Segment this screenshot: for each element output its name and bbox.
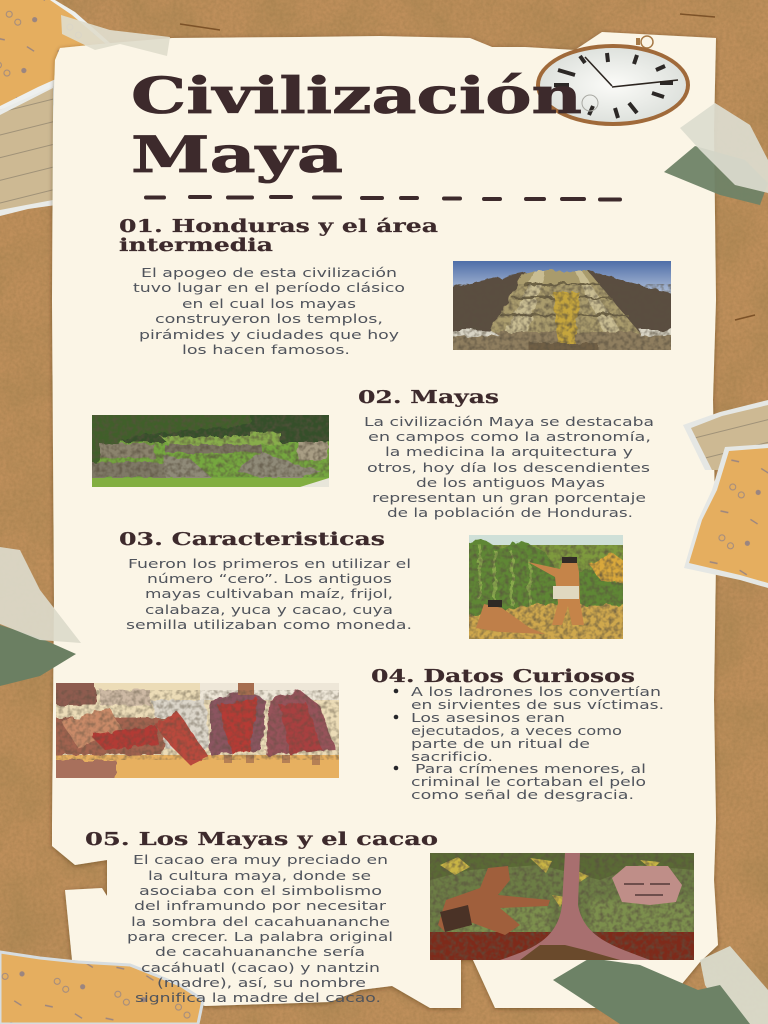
title: Civilización	[131, 66, 582, 125]
body text: 02: de la población de Honduras.	[387, 505, 633, 520]
body text: 01: El apogeo de esta civilización	[141, 265, 397, 280]
heading: 02: 02. Mayas	[358, 388, 499, 408]
body text: 05: (madre), así, su nombre	[157, 975, 366, 990]
body text: 02: la medicina la arquitectura y	[385, 444, 633, 459]
pocket watch	[536, 36, 690, 126]
body text: 03: semilla utilizaban como moneda.	[126, 617, 412, 632]
section 04	[50, 667, 664, 802]
body text: 05: El cacao era muy preciado en	[133, 852, 388, 867]
section 03	[119, 530, 630, 645]
body text: 05: la cultura maya, donde se	[148, 868, 371, 883]
bullet list: 04: sacrificio.	[411, 749, 493, 764]
bullet list: 04: A los ladrones los convertían	[411, 684, 661, 699]
scrap: bottom-left patterned paper	[0, 952, 203, 1024]
body text: 03: calabaza, yuca y cacao, cuya	[145, 602, 393, 617]
body text: 01: tuvo lugar en el período clásico	[133, 280, 405, 295]
heading: 03: 03. Caracteristicas	[119, 530, 385, 550]
body text: 03: Fueron los primeros en utilizar el	[128, 556, 411, 571]
body text: 03	[126, 556, 412, 632]
body text: 01: en el cual los mayas	[182, 296, 356, 311]
body text: 02: representan un gran porcentaje	[372, 490, 646, 505]
body text: 03: número “cero”. Los antiguos	[147, 571, 392, 586]
tape: left green and grey	[0, 547, 81, 686]
tape: top-left	[61, 15, 170, 56]
photo: cacao tree painting	[430, 853, 694, 960]
title: Maya	[131, 125, 343, 184]
body text: 02: La civilización Maya se destacaba	[364, 414, 654, 429]
body text: 05: cacáhuatl (cacao) y nantzin	[141, 960, 380, 975]
section 02	[85, 388, 654, 520]
photo: pyramid	[453, 261, 671, 350]
body text: 01	[133, 265, 405, 357]
bullet list: 04: como señal de desgracia.	[411, 787, 634, 802]
section 01	[119, 217, 680, 357]
body text: 02: de los antiguos Mayas	[416, 475, 605, 490]
bullet list: 04: Para crímenes menores, al	[415, 761, 646, 776]
title	[131, 66, 582, 184]
heading: 01	[119, 217, 438, 256]
section 05	[85, 830, 694, 1005]
bullet list: 04: parte de un ritual de	[411, 736, 590, 751]
body text: 01: pirámides y ciudades que hoy	[139, 327, 399, 342]
body text: 05: la sombra del cacahuananche	[131, 914, 390, 929]
photo: corn farmers	[469, 535, 623, 639]
body text: 02: en campos como la astronomía,	[368, 429, 651, 444]
divider dashes	[146, 197, 620, 200]
scrap: top-left patterned paper	[0, 0, 118, 110]
body text: 05	[127, 852, 393, 1005]
bullet list: 04: ejecutados, a veces como	[411, 723, 622, 738]
scrap: top-left lined paper	[0, 80, 56, 216]
body text: 02: otros, hoy día los descendientes	[367, 460, 650, 475]
body text: 02	[364, 414, 654, 520]
bullet list: 04	[394, 684, 664, 802]
tape: bottom-right green and grey	[553, 946, 768, 1024]
body text: 01: construyeron los templos,	[155, 311, 383, 326]
body text: 03: mayas cultivaban maíz, frijol,	[145, 586, 393, 601]
body text: 05: de cacahuananche sería	[155, 944, 365, 959]
tape: right green and grey	[664, 103, 768, 205]
photo: ball court	[92, 415, 329, 487]
heading: 04: 04. Datos Curiosos	[371, 667, 635, 687]
body text: 05: asociaba con el simbolismo	[139, 883, 382, 898]
heading: 05: 05. Los Mayas y el cacao	[85, 830, 438, 850]
body text: 05: del inframundo por necesitar	[134, 898, 387, 913]
photo: Maya ritual scene	[50, 680, 339, 782]
body text: 01: los hacen famosos.	[182, 342, 350, 357]
scrap: right patterned paper	[684, 444, 768, 588]
heading: 01: intermedia	[119, 236, 273, 256]
bullet list: 04: en sirvientes de sus víctimas.	[411, 697, 664, 712]
body text: 05: para crecer. La palabra original	[127, 929, 393, 944]
scrap: right lined paper	[683, 400, 768, 470]
bullet list: 04: Los asesinos eran	[411, 710, 565, 725]
heading: 01: 01. Honduras y el área	[119, 217, 438, 237]
bullet list: 04: criminal le cortaban el pelo	[411, 774, 646, 789]
body text: 05: significa la madre del cacao.	[135, 990, 381, 1005]
